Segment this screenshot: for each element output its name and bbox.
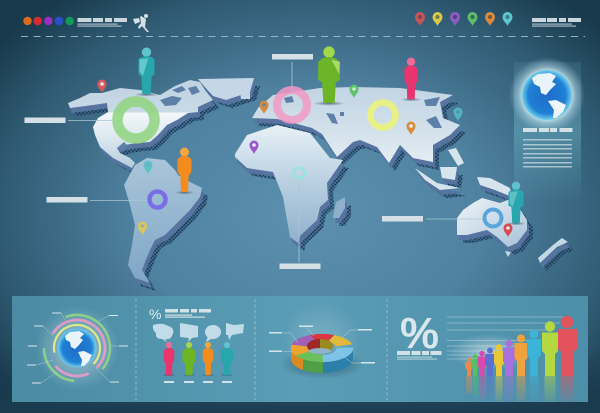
pin: cyan: [144, 160, 152, 174]
Eurasia: [252, 87, 460, 163]
people bar chart: [465, 316, 577, 376]
label line and bar: North America: [24, 118, 112, 123]
donut labels: [269, 326, 375, 364]
inland seas and eastern channels: [284, 96, 442, 128]
figure: pink person Asia: [400, 58, 422, 101]
percent heading and text placeholder: [149, 306, 211, 322]
Australia: [457, 198, 527, 247]
header right: pin legend: [415, 12, 512, 26]
New Zealand: [538, 238, 568, 263]
label line and bar: Africa: [280, 180, 320, 269]
speech bubbles: [153, 323, 244, 342]
glow behind people bars: [450, 334, 530, 370]
bar chart guide lines: [447, 317, 565, 359]
panel: bottom infographic strip: [12, 296, 588, 402]
land side extrusion: [70, 83, 570, 288]
pin: purple: [250, 140, 258, 154]
figure: teal person Australia: [506, 182, 526, 225]
pin: teal: [454, 108, 462, 121]
Canada inland waters: [117, 86, 200, 151]
dashed panel dividers: [136, 299, 387, 400]
pin: red: [98, 80, 106, 93]
ring: green North America: [118, 102, 154, 138]
header left: colored balls: [23, 17, 74, 25]
pin: orange: [260, 100, 268, 114]
people bar chart reflection: [466, 376, 574, 402]
globe icon: [509, 57, 585, 133]
ring: yellow Asia: [370, 102, 396, 128]
North America: [68, 80, 213, 168]
figure: teal person North America: [134, 48, 159, 96]
ring: cyan Africa: [294, 168, 304, 178]
world map: [68, 78, 574, 291]
South America: [124, 158, 202, 283]
Africa: [235, 125, 343, 243]
label line and bar: Australia: [382, 216, 484, 222]
chart labels: [27, 313, 128, 383]
pin: green: [350, 84, 358, 98]
pin: orange Asia: [406, 122, 416, 135]
figure: orange person South America: [175, 148, 194, 194]
pin: red Australia: [504, 224, 512, 237]
globe icon: [58, 328, 96, 368]
people row: [162, 342, 234, 383]
text placeholder: [523, 128, 572, 168]
Madagascar: [333, 197, 345, 218]
Indonesia and New Guinea: [415, 148, 512, 197]
label line and bar: Europe: [272, 54, 313, 87]
pin: yellow: [138, 222, 147, 235]
radial globe chart: [27, 306, 128, 390]
header right: text placeholder: [532, 18, 581, 27]
label line and bar: South America: [46, 197, 148, 202]
Greenland: [198, 78, 254, 100]
figure: green person Asia: [313, 46, 345, 106]
ring: pink Europe: [277, 90, 307, 120]
header left: text placeholder: [78, 18, 127, 27]
ring: purple South America: [150, 192, 166, 208]
big percent and text placeholder: %: [400, 309, 439, 358]
panel: globe and text: [509, 57, 585, 202]
percent heading and text placeholder: %: [149, 306, 161, 322]
halftone shadows: [74, 86, 574, 291]
ring: blue Australia: [484, 210, 502, 226]
Iceland: [240, 92, 250, 99]
icon: running businessman: [133, 14, 149, 32]
Tasmania: [505, 251, 511, 257]
donut chart: [269, 300, 375, 380]
dashed divider: [21, 36, 585, 38]
